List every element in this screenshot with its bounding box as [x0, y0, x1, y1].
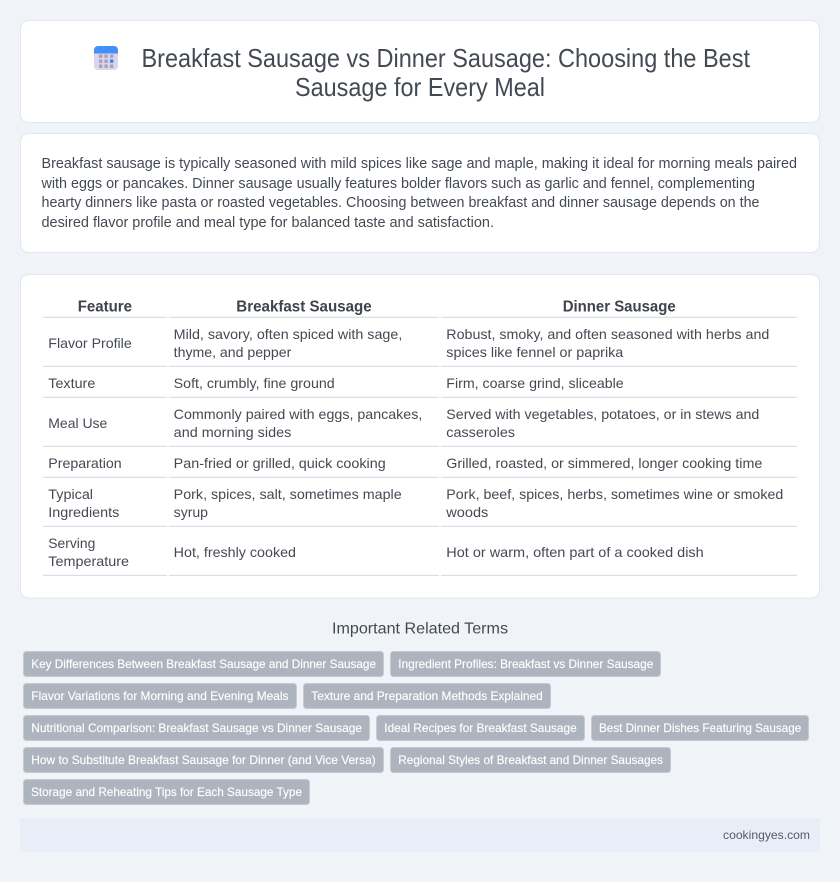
tag: Regional Styles of Breakfast and Dinner Sausages	[398, 753, 663, 767]
row: serving temperature: Hot, freshly cooked	[174, 544, 296, 560]
text block: introduction: desired flavor profile and meal type for balanced taste and satisfaction.	[42, 215, 494, 231]
row: flavor profile: Mild, savory, often spiced with sage,	[174, 326, 402, 342]
heading: important related terms: Important Related Terms	[332, 620, 508, 638]
row: texture: Firm, coarse grind, sliceable	[446, 375, 624, 391]
row: texture: Soft, crumbly, fine ground	[174, 375, 335, 391]
tag: How to Substitute Breakfast Sausage for Dinner (and Vice Versa)	[31, 753, 376, 767]
tag	[376, 716, 584, 740]
row: meal use	[48, 406, 759, 440]
tag	[304, 684, 550, 708]
row: flavor profile: Robust, smoky, and often seasoned with herbs and	[446, 326, 769, 342]
panel: introduction	[20, 134, 820, 252]
table header row: Feature	[78, 298, 132, 316]
row: meal use: Meal Use	[48, 415, 108, 431]
row: typical ingredients: Pork, spices, salt, sometimes maple	[174, 486, 402, 502]
footer source text: cookingyes.com	[723, 828, 810, 842]
tag	[24, 652, 384, 676]
row: serving temperature	[48, 535, 704, 569]
row: preparation: Pan-fried or grilled, quick cooking	[174, 455, 386, 471]
tag	[24, 716, 370, 740]
row: texture	[48, 375, 624, 391]
table header row: Breakfast Sausage	[236, 298, 372, 316]
title: Sausage for Every Meal	[295, 74, 545, 102]
row: serving temperature: Serving	[48, 535, 95, 551]
tag	[24, 780, 310, 804]
row: texture: Texture	[48, 375, 96, 391]
row: preparation: Grilled, roasted, or simmered, longer cooking time	[446, 455, 763, 471]
tag: Texture and Preparation Methods Explained	[311, 689, 543, 703]
tag	[24, 748, 384, 772]
row: meal use: Commonly paired with eggs, pancakes,	[174, 406, 422, 422]
row: typical ingredients: Typical	[48, 486, 93, 502]
row: typical ingredients	[48, 486, 783, 520]
tag	[390, 748, 670, 772]
tag	[390, 652, 660, 676]
panel: comparison table	[20, 274, 820, 598]
row: flavor profile: Flavor Profile	[48, 335, 132, 351]
title	[142, 45, 750, 102]
icon: calendar	[94, 46, 118, 70]
row: preparation: Preparation	[48, 455, 122, 471]
table header row: Dinner Sausage	[563, 298, 676, 316]
row: serving temperature: Hot or warm, often part of a cooked dish	[446, 544, 704, 560]
tag: Ingredient Profiles: Breakfast vs Dinner Sausage	[398, 657, 654, 671]
text block: introduction: with eggs or pancakes. Dinner sausage usually features bolder flavors such as garlic and fennel, complementing	[41, 176, 755, 192]
row: flavor profile	[48, 326, 769, 360]
tag: Flavor Variations for Morning and Evening Meals	[31, 689, 289, 703]
row: preparation	[48, 455, 763, 471]
row: meal use: casseroles	[446, 424, 515, 440]
text block: introduction: Breakfast sausage is typically seasoned with mild spices like sage and maple, making it ideal for morning meals paired	[42, 156, 797, 172]
row: meal use: and morning sides	[174, 424, 291, 440]
row: flavor profile: spices like fennel or paprika	[446, 344, 624, 360]
row: flavor profile: thyme, and pepper	[174, 344, 292, 360]
tag: Best Dinner Dishes Featuring Sausage	[599, 721, 802, 735]
tag	[592, 716, 808, 740]
text block: introduction	[41, 156, 797, 231]
tag: Nutritional Comparison: Breakfast Sausage vs Dinner Sausage	[31, 721, 362, 735]
panel: related term tags	[24, 652, 808, 804]
panel: header	[20, 20, 820, 122]
tag	[24, 684, 296, 708]
row: typical ingredients: Ingredients	[48, 504, 119, 520]
row: typical ingredients: syrup	[174, 504, 208, 520]
row: meal use: Served with vegetables, potatoes, or in stews and	[446, 406, 759, 422]
tag: Storage and Reheating Tips for Each Sausage Type	[31, 785, 302, 799]
row: serving temperature: Temperature	[48, 553, 129, 569]
row: typical ingredients: woods	[445, 504, 488, 520]
table header row	[78, 298, 676, 316]
row: typical ingredients: Pork, beef, spices, herbs, sometimes wine or smoked	[446, 486, 783, 502]
footer	[20, 818, 820, 852]
tag: Ideal Recipes for Breakfast Sausage	[384, 721, 577, 735]
tag: Key Differences Between Breakfast Sausage and Dinner Sausage	[31, 657, 376, 671]
title: Breakfast Sausage vs Dinner Sausage: Choosing the Best	[142, 45, 750, 73]
text block: introduction: hearty dinners like pasta or roasted vegetables. Choosing between breakfast and dinner sausage depends on the	[42, 195, 760, 211]
